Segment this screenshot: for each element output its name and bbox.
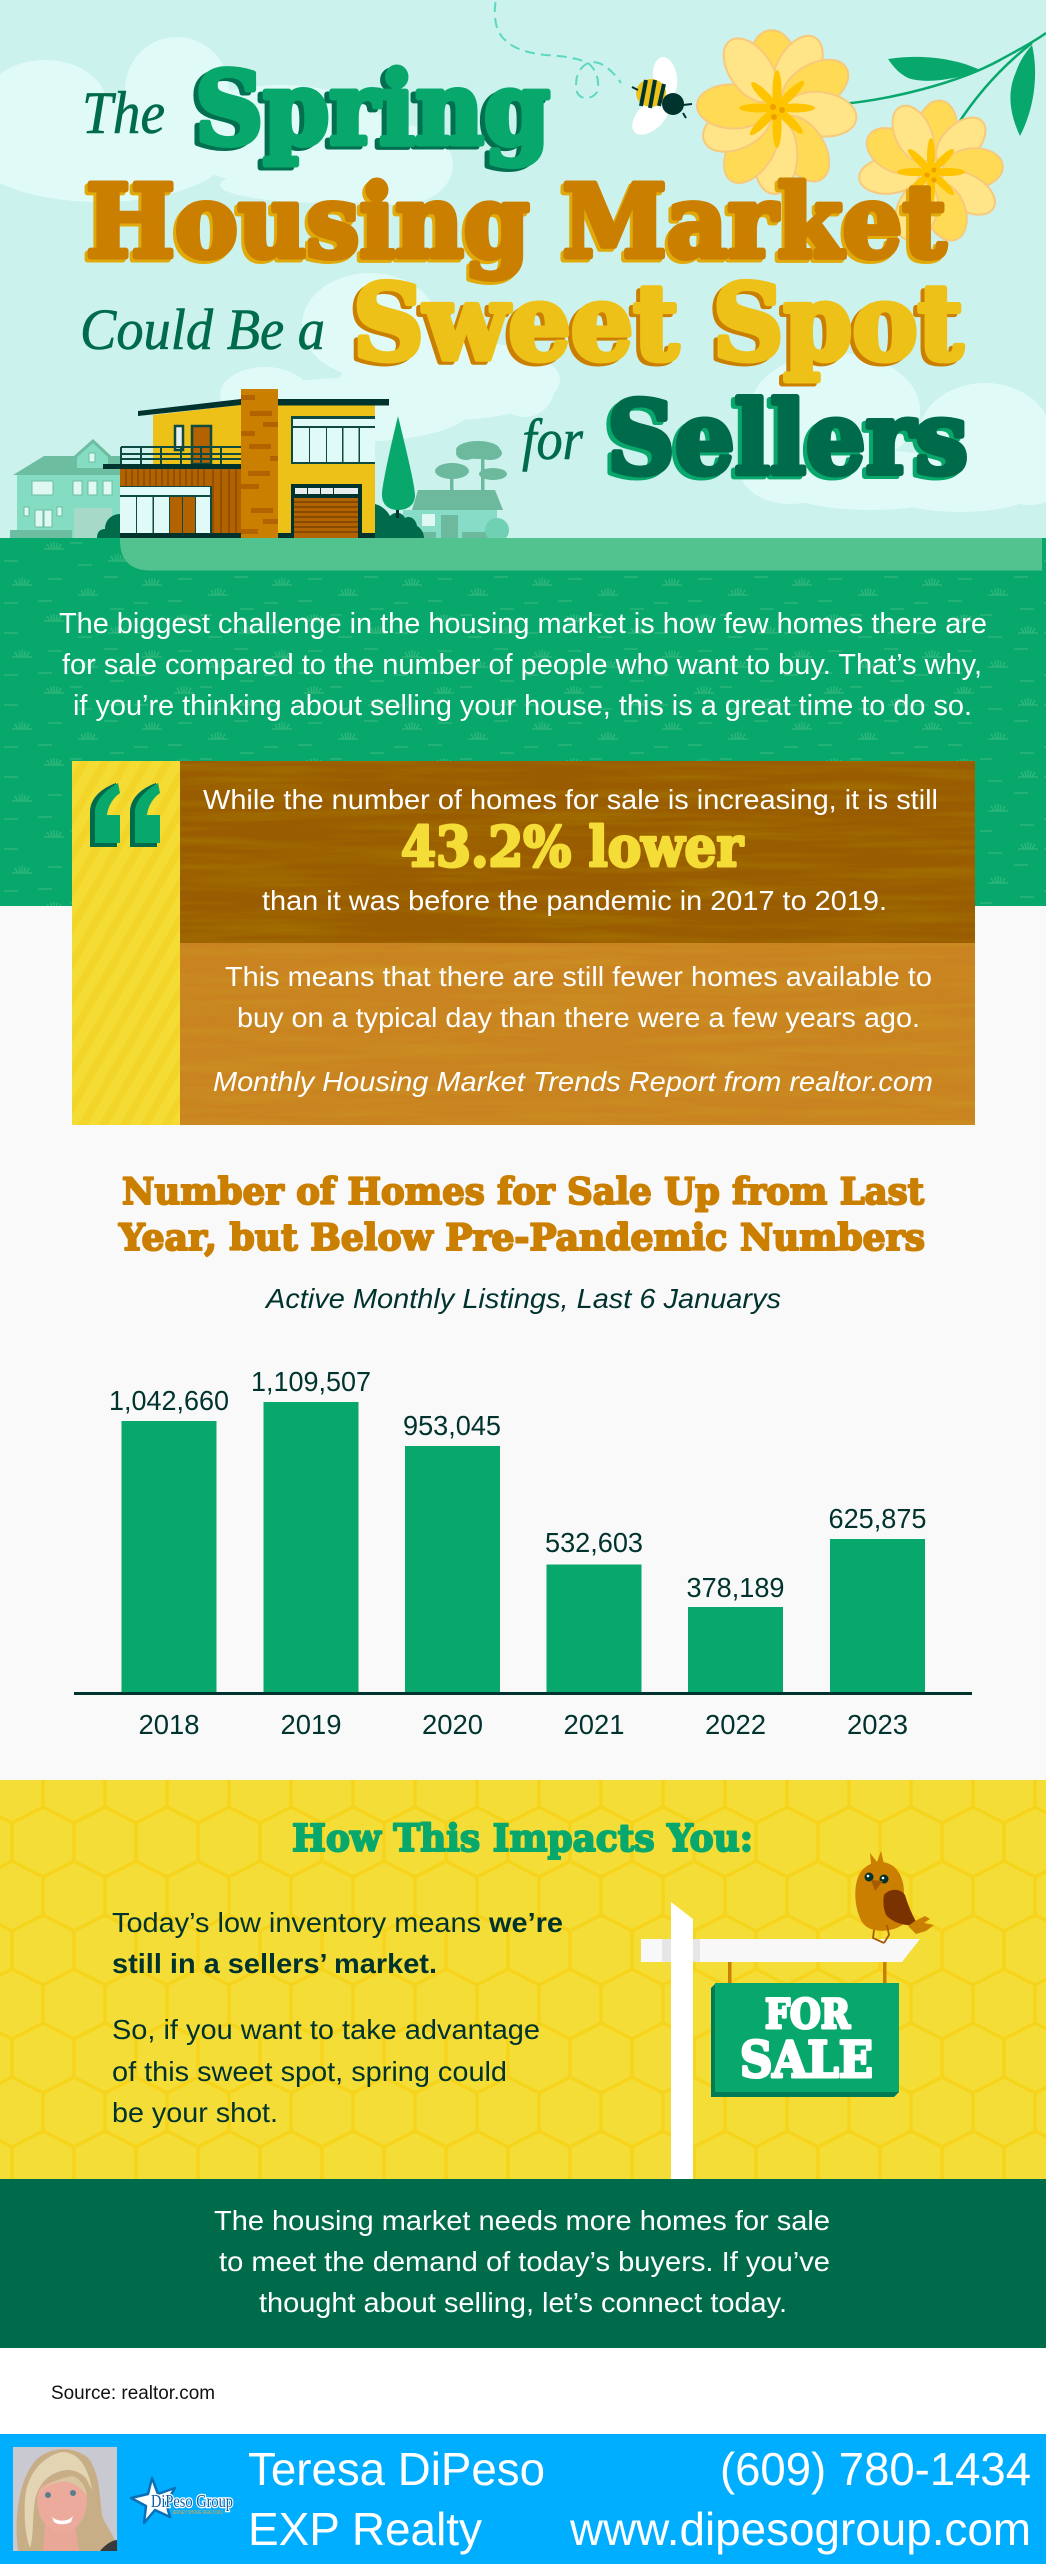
chimney [241, 389, 278, 538]
quote yellow strip [72, 761, 180, 1125]
title words: Sweet Spot: Sweet Spot [349, 264, 959, 387]
ground floor windows [120, 486, 212, 534]
year labels: 2021 [564, 1709, 624, 1740]
value labels: 625,875 [828, 1503, 926, 1534]
impact text: of this sweet spot, spring could [112, 2056, 507, 2087]
upper right window [291, 416, 375, 464]
call to action text [214, 2205, 830, 2318]
white source band [0, 2348, 1046, 2434]
title word: for: for [522, 407, 583, 472]
value labels: 1,042,660 [109, 1385, 229, 1416]
call to action text: to meet the demand of today’s buyers. If you’ve [219, 2246, 830, 2277]
icon: large flower [695, 28, 859, 195]
background house and trees right [403, 441, 509, 542]
agent company: EXP Realty [248, 2503, 482, 2555]
agent photo [13, 2447, 117, 2551]
call to action text: thought about selling, let’s connect today. [259, 2287, 787, 2318]
title words: Housing Market: Housing Market [86, 162, 946, 280]
intro text: if you’re thinking about selling your house, this is a great time to do so. [73, 690, 972, 722]
balcony door and window [175, 426, 211, 464]
year labels: 2023 [847, 1709, 908, 1740]
quote text: This means that there are still fewer homes available to [225, 961, 932, 992]
quote text: Monthly Housing Market Trends Report from realtor.com [213, 1066, 933, 1097]
intro text [59, 608, 987, 722]
value labels: 953,045 [403, 1410, 501, 1441]
background house left [10, 441, 120, 538]
title [80, 50, 968, 500]
quote text: than it was before the pandemic in 2017 to 2019. [262, 885, 887, 916]
section heading: How This Impacts You: [292, 1816, 753, 1860]
chart heading: Number of Homes for Sale Up from Last [122, 1171, 924, 1213]
quote text [203, 784, 938, 1097]
house roof [138, 399, 389, 416]
for sale sign [641, 1902, 920, 2179]
year labels: 2020 [422, 1709, 483, 1740]
impact text: still in a sellers’ market. [112, 1948, 437, 1979]
panel: how this impacts you [0, 1780, 1046, 2179]
panel: quote [72, 761, 975, 1125]
year labels: 2018 [138, 1709, 200, 1740]
for sale sign: SALE [740, 2030, 873, 2089]
dark wood panel [180, 761, 975, 944]
title words: Sweet Spot: Sweet Spot [353, 261, 963, 384]
icon: bee [626, 56, 692, 141]
logo name: DiPeso Group [151, 2491, 233, 2511]
impact text: be your shot. [112, 2097, 278, 2128]
title word: The: The [82, 80, 165, 146]
axis [74, 1692, 972, 1695]
chart heading [118, 1171, 925, 1259]
clouds [0, 37, 1046, 512]
quote text: While the number of homes for sale is increasing, it is still [203, 784, 938, 815]
title word: Spring: Spring [195, 50, 550, 168]
sky background [0, 0, 1046, 540]
title words: Housing Market: Housing Market [83, 166, 943, 284]
value labels: 1,109,507 [251, 1366, 371, 1397]
value labels: 378,189 [686, 1572, 784, 1603]
tree [382, 416, 415, 518]
quote text: buy on a typical day than there were a few years ago. [237, 1002, 920, 1033]
bee flight dashed trail [495, 2, 621, 98]
balcony railing [121, 447, 241, 465]
for sale sign: FOR [765, 1991, 851, 2038]
source: Source: realtor.com [51, 2383, 215, 2404]
icon: bird [855, 1851, 934, 1943]
main house [97, 389, 424, 538]
ground [0, 538, 1046, 906]
quote statistic: 43.2% lower [401, 814, 744, 879]
chart subtitle: Active Monthly Listings, Last 6 Januarys [264, 1283, 781, 1314]
bars [122, 1402, 925, 1692]
wood cladding [120, 469, 241, 534]
bar chart [74, 1366, 972, 1740]
logo tagline: JERSEY SHORE REALTORS [172, 2510, 224, 2516]
impact text: So, if you want to take advantage [112, 2014, 540, 2045]
stem and leaves [830, 33, 1046, 136]
title word: Sellers: Sellers [603, 382, 964, 500]
icon: small flower [858, 98, 1004, 246]
title words: Could Be a: Could Be a [80, 297, 325, 362]
value labels [109, 1366, 926, 1603]
value labels: 532,603 [545, 1527, 643, 1558]
agent website: www.dipesogroup.com [569, 2503, 1031, 2555]
chart heading: Year, but Below Pre-Pandemic Numbers [118, 1217, 925, 1259]
intro text: for sale compared to the number of people who want to buy. That’s why, [62, 649, 982, 681]
logo [131, 2478, 233, 2523]
call to action text: The housing market needs more homes for sale [214, 2205, 830, 2236]
panel: call to action [0, 2179, 1046, 2348]
title word: Sellers: Sellers [607, 379, 968, 497]
agent phone: (609) 780-1434 [720, 2443, 1031, 2495]
intro text: The biggest challenge in the housing market is how few homes there are [59, 608, 987, 640]
agent name: Teresa DiPeso [248, 2443, 545, 2495]
impact text [112, 1907, 563, 2128]
panel: agent footer [0, 2434, 1046, 2564]
starfish [131, 2478, 175, 2523]
icon: quotation marks [90, 783, 160, 847]
light wood panel [180, 943, 975, 1125]
year labels: 2022 [705, 1709, 766, 1740]
year labels: 2019 [280, 1709, 342, 1740]
garage [291, 484, 362, 538]
impact text: Today’s low inventory means we’re [112, 1907, 563, 1938]
bushes [97, 504, 424, 538]
title word: Spring: Spring [190, 52, 545, 170]
year labels [138, 1709, 908, 1740]
